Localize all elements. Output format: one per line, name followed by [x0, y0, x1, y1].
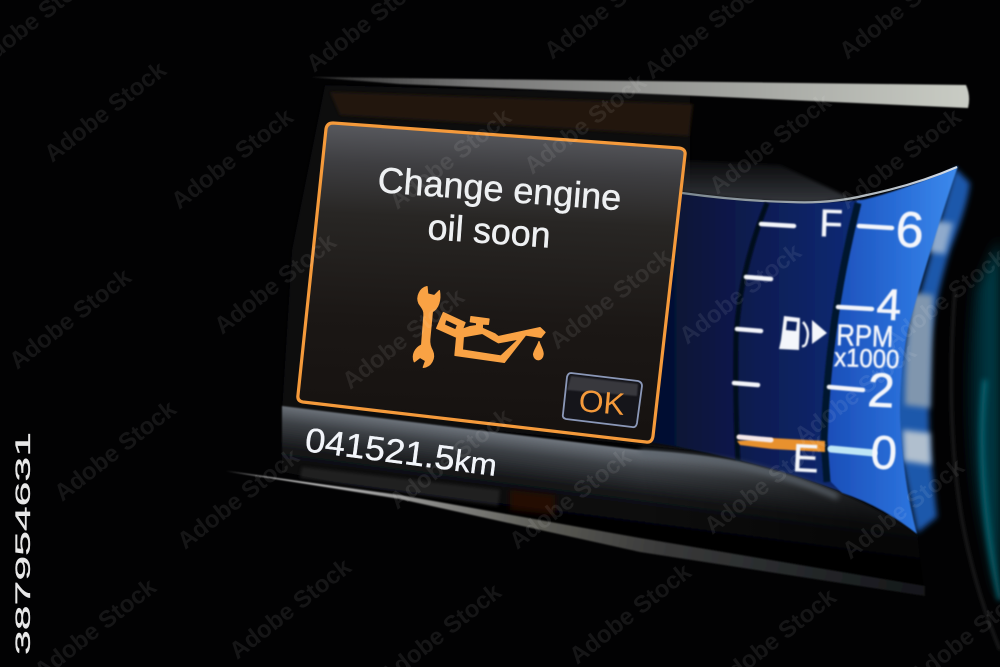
label: RPM x1000: x1000 — [834, 342, 900, 374]
stock watermarks: Adobe Stock — [834, 103, 967, 215]
ring highlight — [982, 380, 1000, 600]
stock watermarks: Adobe Stock — [384, 103, 517, 215]
RPM tick marks — [829, 226, 892, 390]
fuel tick marks — [734, 224, 794, 385]
panel: bright blue tachometer band — [824, 166, 958, 534]
stock watermarks: Adobe Stock — [504, 443, 637, 555]
stock watermarks: Adobe Stock — [699, 428, 832, 540]
text: odometer reading: 041521.5km — [303, 421, 499, 484]
message box — [298, 123, 685, 442]
heading: message line 1: Change engine — [376, 159, 623, 218]
stock watermarks: Adobe Stock — [564, 558, 697, 667]
button: OK — [563, 373, 642, 427]
icon: oil drop — [534, 342, 543, 360]
panel: navy fuel background — [650, 192, 862, 492]
stock watermarks: Adobe Stock — [789, 338, 922, 450]
stock watermarks: Adobe Stock — [209, 228, 342, 340]
stock watermarks: Adobe Stock — [172, 443, 305, 555]
RPM numbers: 6 — [894, 201, 925, 258]
blurred odometer reflection — [300, 467, 500, 506]
right instrument teal ring — [969, 240, 1000, 600]
stock watermarks: Adobe Stock — [704, 88, 837, 200]
stock watermarks: Adobe Stock — [4, 263, 137, 375]
RPM numbers — [866, 201, 925, 479]
RPM numbers: 4 — [875, 280, 902, 330]
left bezel behind screen — [282, 85, 690, 450]
icon: wrench — [413, 287, 440, 367]
stock watermarks: Adobe Stock — [519, 68, 652, 180]
RPM numbers: 0 — [869, 425, 898, 479]
stock watermarks: Adobe Stock — [544, 243, 677, 355]
tick: zero — [831, 449, 874, 453]
panel: warning message — [298, 123, 685, 442]
lower chrome strip — [226, 471, 925, 596]
label: RPM x1000 — [834, 319, 900, 374]
bezel: right side shade — [640, 450, 925, 596]
stock watermarks: Adobe Stock — [337, 283, 470, 395]
heading: message line 2: oil soon — [426, 206, 552, 256]
fuel level bar — [737, 438, 825, 452]
panel: gauges — [650, 166, 970, 534]
stock watermarks: Adobe Stock — [166, 103, 299, 215]
dark arc left — [736, 203, 767, 462]
stock watermarks: Adobe Stock — [49, 395, 182, 507]
RPM numbers: 2 — [866, 364, 896, 418]
icon: oil can — [437, 313, 545, 362]
stock watermarks: Adobe Stock — [674, 238, 807, 350]
ring dark outer line — [951, 290, 1000, 650]
label: RPM x1000: RPM — [836, 319, 894, 354]
dark arc right — [824, 203, 858, 482]
stock watermarks: Adobe Stock — [384, 403, 517, 515]
amber reflection strip — [330, 92, 693, 136]
panel: outer blurred blue band — [890, 168, 970, 533]
pale reflection: top — [929, 221, 953, 254]
top chrome strip — [310, 77, 969, 108]
icon: fuel pump with arrow — [779, 316, 827, 350]
button: OK: OK — [577, 383, 627, 422]
label: F: F — [819, 203, 843, 246]
shelf above gauge — [682, 160, 850, 202]
bezel: odometer band and lower cowl — [282, 406, 925, 596]
gauge top edge highlight — [682, 167, 957, 202]
stock image id: 387954631 — [12, 432, 35, 655]
stock watermarks: Adobe Stock — [837, 453, 970, 565]
pale reflection: mid — [905, 293, 933, 408]
icon: wrench and oil can — [413, 287, 545, 367]
red reflection — [510, 490, 555, 515]
bezel: top edge sheen — [640, 452, 838, 497]
stock watermarks: Adobe Stock — [224, 553, 357, 665]
stock watermarks: Adobe Stock — [39, 56, 172, 168]
label: E: E — [792, 437, 820, 481]
pale reflection: low — [903, 430, 931, 465]
fuel empty tick — [739, 437, 771, 440]
